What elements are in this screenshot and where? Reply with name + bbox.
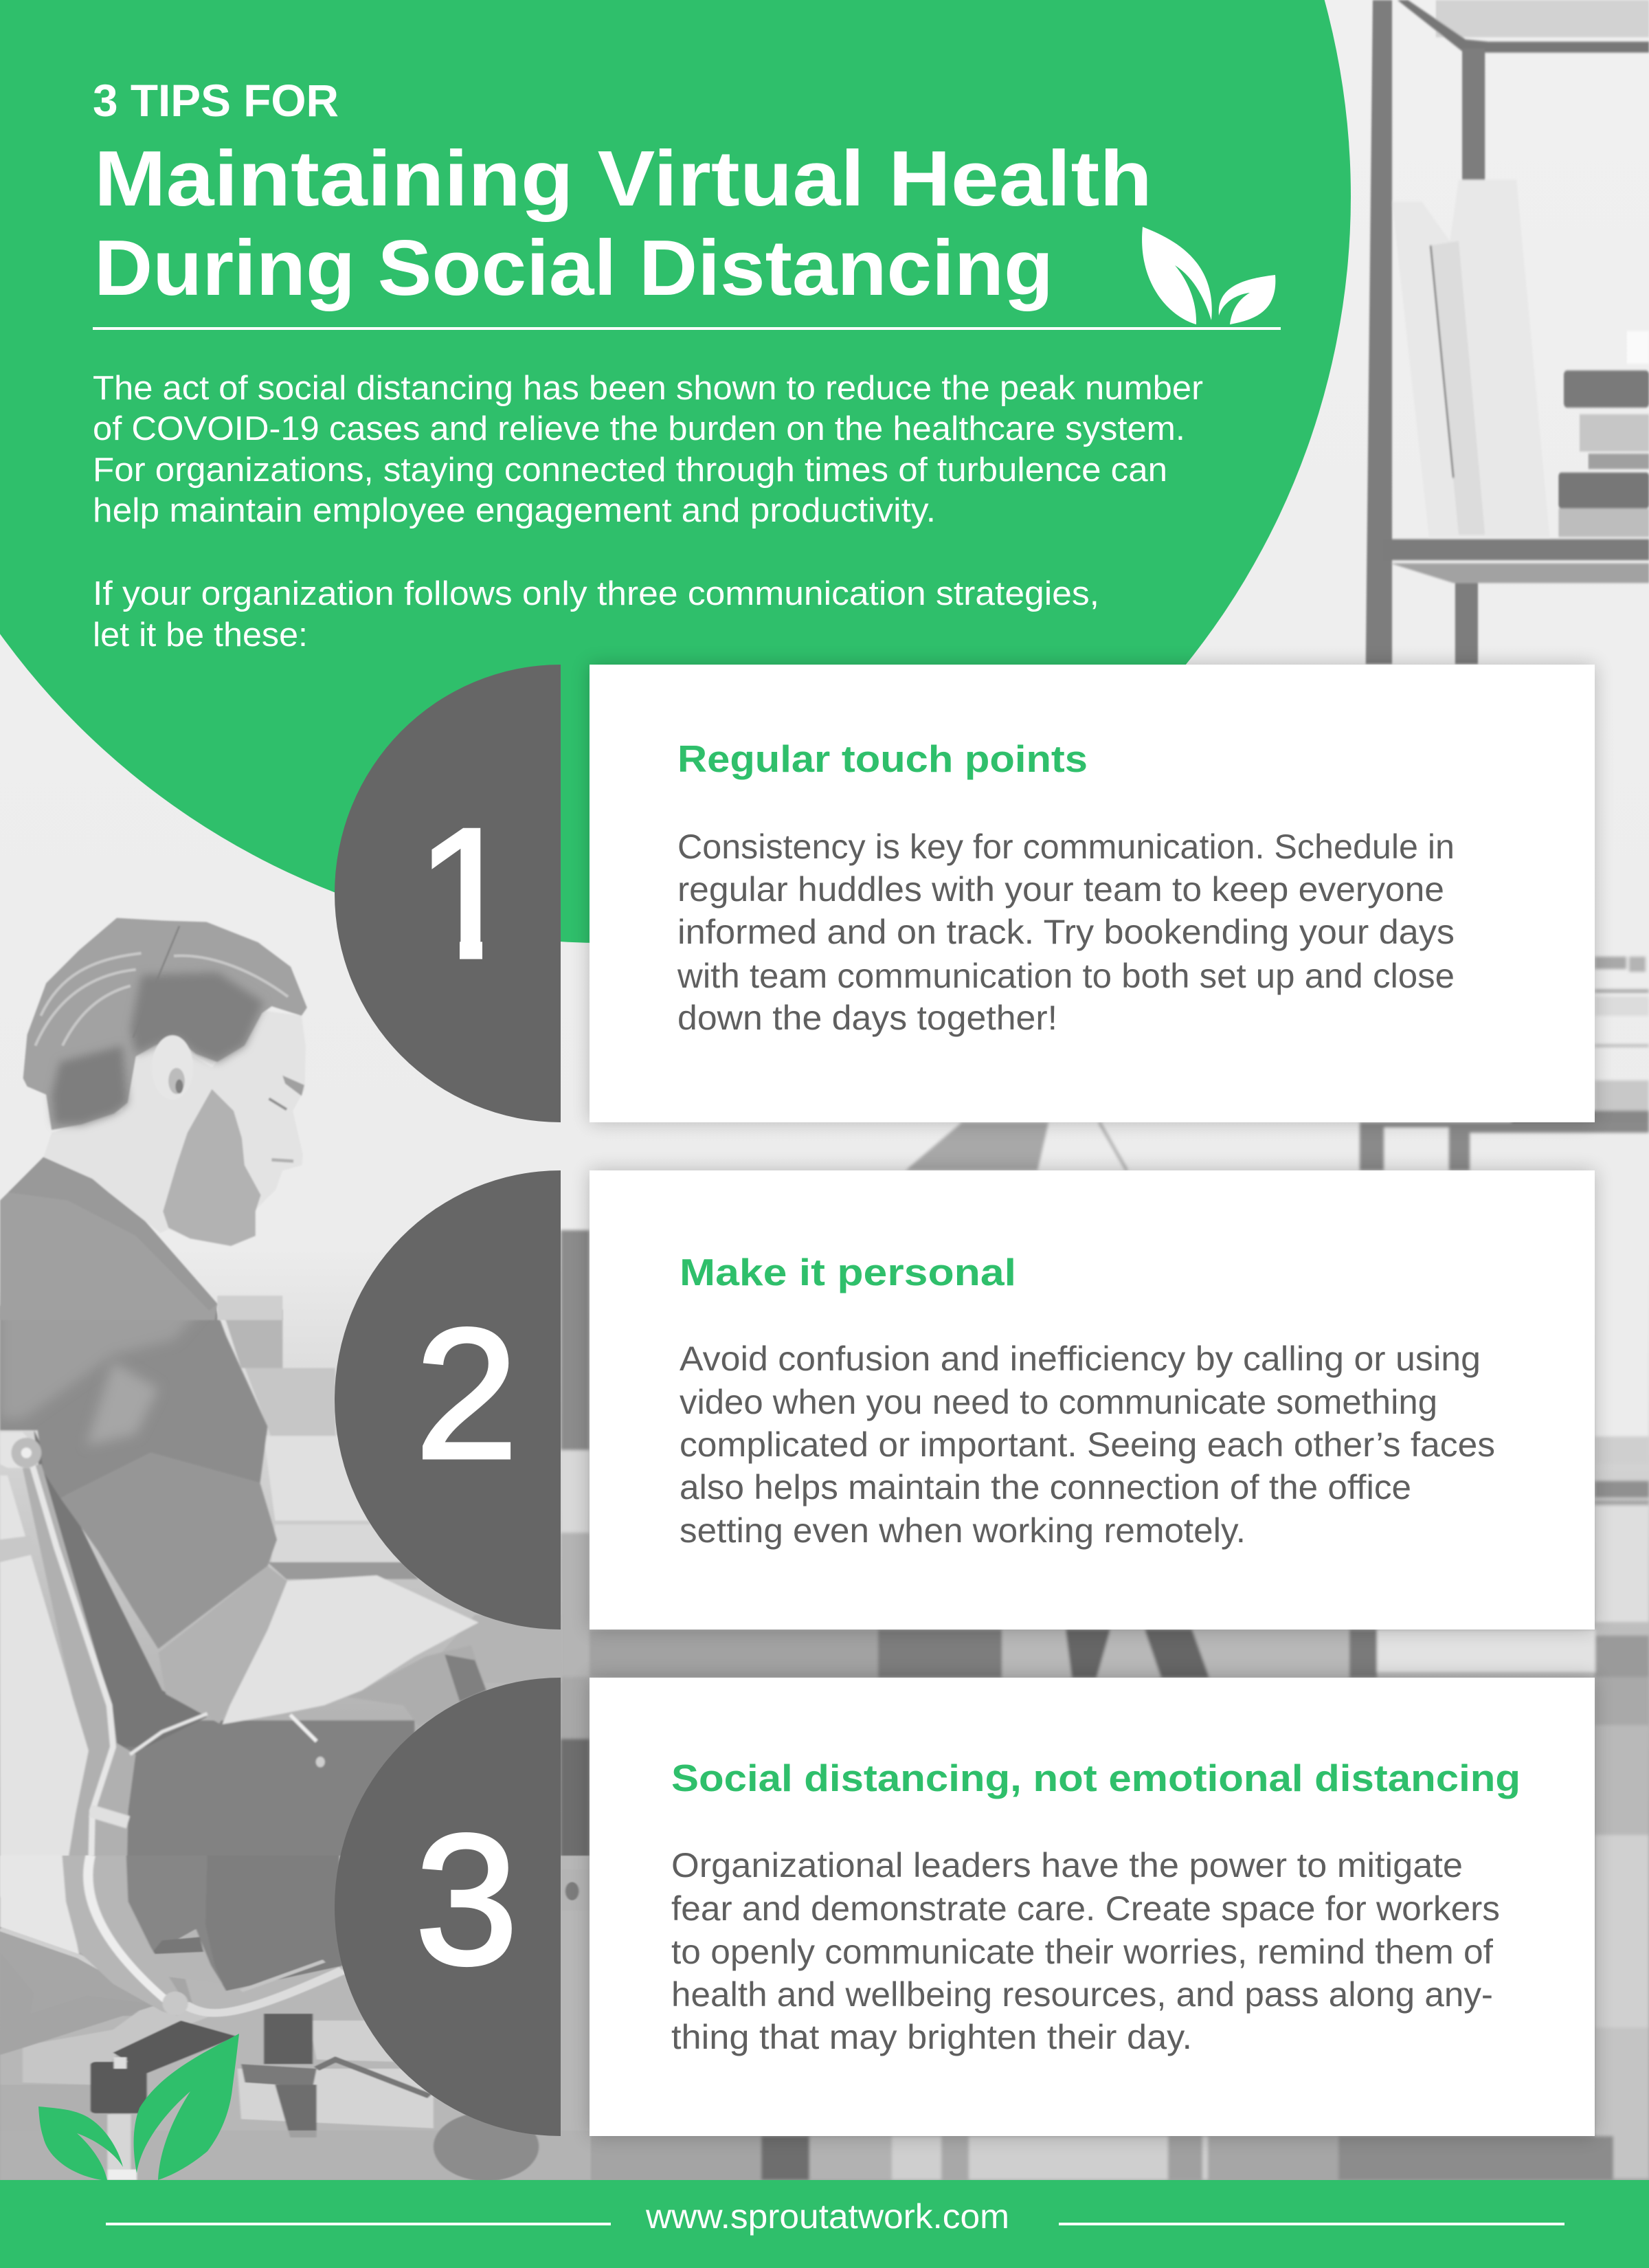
tip 1 body: regular huddles with your team to keep everyone <box>677 870 1444 909</box>
photo: seat, floor and chair base <box>0 1856 591 2181</box>
card background <box>590 1678 1595 2136</box>
lead-in sentence: If your organization follows only three communication strategies, <box>93 575 1099 612</box>
intro paragraph: of COVOID-19 cases and relieve the burden on the healthcare system. <box>93 410 1185 447</box>
tip 3 body: to openly communicate their worries, remind them of <box>671 1933 1493 1971</box>
tip 3 body: Organizational leaders have the power to mitigate <box>671 1846 1463 1885</box>
main title: Maintaining Virtual Health <box>94 135 1152 223</box>
intro paragraph: For organizations, staying connected through times of turbulence can <box>93 452 1167 489</box>
tip 1 body: Consistency is key for communication. Schedule in <box>677 827 1455 866</box>
number half circle <box>335 1678 561 2136</box>
tip 2 body <box>680 1339 1495 1550</box>
tip 2 body: complicated or important. Seeing each other’s faces <box>680 1425 1495 1464</box>
main title: During Social Distancing <box>94 225 1053 312</box>
tip 2 body: setting even when working remotely. <box>680 1511 1246 1550</box>
photo: man torso, arm and chair back <box>0 1306 561 1902</box>
tip 3 body: thing that may brighten their day. <box>671 2018 1192 2056</box>
photo: man's head and collar <box>0 918 307 1320</box>
card background <box>590 1170 1595 1630</box>
number half circle <box>335 1170 561 1630</box>
panel: tip 1 <box>335 665 1595 1122</box>
number 1: 1 <box>416 790 519 997</box>
card shadow <box>590 665 1595 1122</box>
tip 2 body: Avoid confusion and inefficiency by calling or using <box>680 1339 1481 1378</box>
tip 3 heading: Social distancing, not emotional distancing <box>671 1757 1521 1799</box>
icon: green sprout leaves <box>38 2034 239 2180</box>
footer website url: www.sproutatwork.com <box>645 2197 1009 2236</box>
tip 1 body: down the days together! <box>677 999 1057 1037</box>
card shadow <box>590 1170 1595 1630</box>
eyebrow: 3 tips for: 3 TIPS FOR <box>93 75 339 126</box>
footer right rule <box>1059 2223 1564 2225</box>
number 3: 3 <box>415 1797 518 2003</box>
panel: header text <box>93 75 1281 654</box>
number 2: 2 <box>415 1291 518 1498</box>
tip 1 body: with team communication to both set up and close <box>677 957 1455 995</box>
tip 1 heading: Regular touch points <box>677 737 1088 780</box>
intro paragraph: The act of social distancing has been shown to reduce the peak number <box>93 370 1203 407</box>
card shadow <box>590 1678 1595 2136</box>
card background <box>590 665 1595 1122</box>
photo: right-hand books and lower shelf <box>561 957 1649 2180</box>
tip 3 body <box>671 1846 1500 2056</box>
tip 3 body: fear and demonstrate care. Create space for workers <box>671 1889 1500 1928</box>
lead-in sentence <box>93 575 1099 654</box>
panel: tip 3 <box>335 1678 1595 2136</box>
main title <box>94 135 1152 312</box>
title underline <box>93 327 1281 330</box>
icon: white leaves <box>1142 227 1275 324</box>
tip 2 body: video when you need to communicate something <box>680 1383 1437 1421</box>
tip 1 body <box>677 827 1455 1037</box>
intro paragraph <box>93 370 1203 529</box>
intro paragraph: help maintain employee engagement and productivity. <box>93 492 936 529</box>
tip 2 heading: Make it personal <box>680 1251 1016 1293</box>
panel: footer band <box>0 2180 1649 2268</box>
photo: shelves upper right <box>1366 0 1649 664</box>
number half circle <box>335 665 561 1122</box>
tip 1 body: informed and on track. Try bookending your days <box>677 913 1455 951</box>
tip 2 body: also helps maintain the connection of the office <box>680 1468 1411 1507</box>
tip 3 body: health and wellbeing resources, and pass along any- <box>671 1975 1493 2014</box>
lead-in sentence: let it be these: <box>93 616 308 654</box>
green header circle <box>0 0 1351 943</box>
panel: tip 2 <box>335 1170 1595 1630</box>
footer left rule <box>106 2223 611 2225</box>
